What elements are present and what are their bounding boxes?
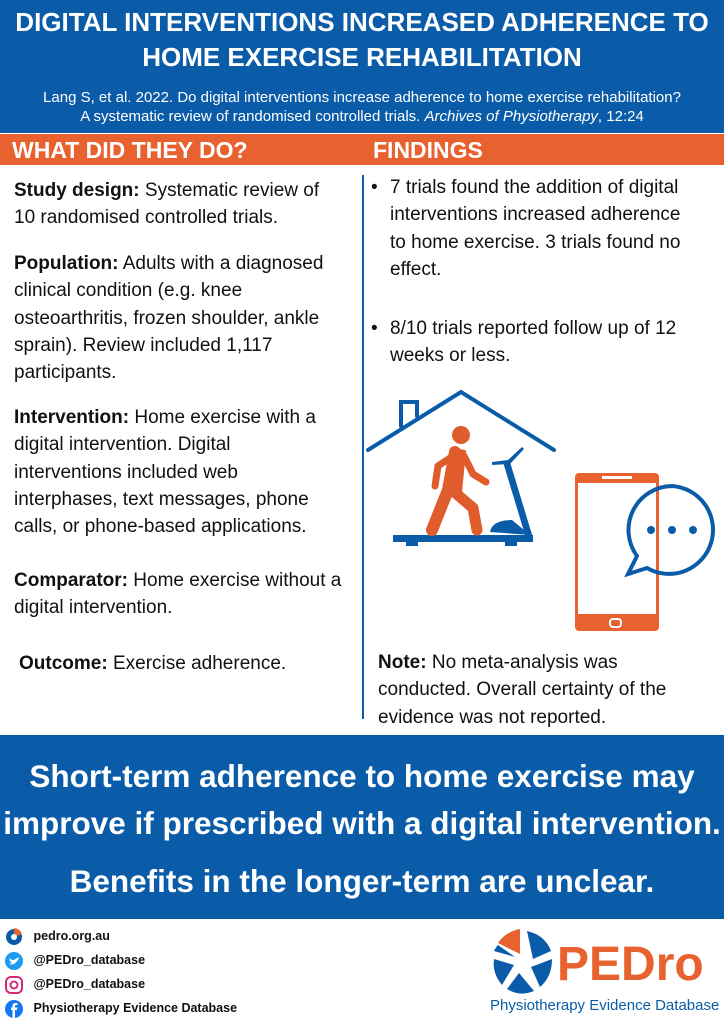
note: evidence was not reported.: [378, 707, 606, 728]
citation: [43, 89, 681, 125]
finding 2: weeks or less.: [390, 345, 510, 366]
text: study design: [14, 180, 320, 228]
text: intervention: interventions included web: [14, 462, 238, 483]
text: comparator: Comparator: Home exercise without a: [14, 570, 341, 591]
link: facebook: [5, 1000, 237, 1018]
text: population: osteoarthritis, frozen shoulder, ankle: [14, 308, 319, 329]
text: intervention: digital intervention. Digital: [14, 434, 231, 455]
text: population: [14, 253, 323, 383]
citation: A systematic review of randomised controlled trials. Archives of Physiotherapy, 12:24: [80, 108, 644, 125]
PEDro logo: [490, 929, 719, 1014]
heading: findings: FINDINGS: [373, 137, 483, 163]
conclusion text: [3, 758, 721, 841]
title: [15, 7, 709, 72]
text: population: participants.: [14, 362, 116, 383]
link: instagram: [5, 976, 145, 994]
logo mark: [494, 929, 552, 994]
link: twitter: @PEDro_database: [33, 953, 145, 967]
text: comparator: digital intervention.: [14, 597, 172, 618]
conclusion text: Short-term adherence to home exercise may: [29, 758, 695, 794]
link: instagram: @PEDro_database: [33, 977, 145, 991]
icon: treadmill: [393, 447, 533, 546]
header panel: [0, 0, 724, 133]
longer-term text: Benefits in the longer-term are unclear.: [70, 863, 654, 899]
section header bar: [0, 134, 724, 165]
finding 1: 7 trials found the addition of digital: [390, 177, 678, 198]
icon: speech bubble: [628, 486, 713, 574]
illustration: home treadmill and phone: [366, 390, 715, 631]
text: study design: Study design: Systematic review of: [14, 180, 319, 201]
link: website: pedro.org.au: [33, 929, 110, 943]
logo wordmark: PEDro: [557, 938, 704, 991]
note: [378, 652, 666, 728]
finding 1: effect.: [390, 259, 441, 280]
link: facebook: Physiotherapy Evidence Database: [33, 1001, 237, 1015]
finding 2: 8/10 trials reported follow up of 12: [390, 318, 676, 339]
text: intervention: Intervention: Home exercise with a: [14, 407, 316, 428]
finding 2: [371, 318, 676, 366]
text: population: sprain). Review included 1,117: [14, 335, 272, 356]
conclusion panel: [0, 735, 724, 919]
note: conducted. Overall certainty of the: [378, 679, 666, 700]
text: comparator: [14, 570, 342, 618]
footer social links: [5, 928, 237, 1018]
text: population: Population: Adults with a diagnosed: [14, 253, 323, 274]
logo tagline: Physiotherapy Evidence Database: [490, 997, 719, 1014]
text: intervention: interphases, text messages, phone: [14, 489, 309, 510]
icon: house roof: [368, 392, 554, 450]
icon: phone: [575, 473, 659, 631]
text: •: [371, 318, 378, 339]
link: website: [6, 928, 110, 945]
text: intervention: [14, 407, 316, 537]
citation: Lang S, et al. 2022. Do digital interventions increase adherence to home exercise rehabilitation?: [43, 89, 681, 106]
icon: walking person: [432, 426, 486, 530]
text: study design: 10 randomised controlled trials.: [14, 207, 278, 228]
conclusion text: improve if prescribed with a digital intervention.: [3, 805, 721, 841]
heading: what did they do: WHAT DID THEY DO?: [12, 137, 248, 163]
text: population: clinical condition (e.g. knee: [14, 280, 242, 301]
text: outcome: Outcome: Exercise adherence.: [19, 653, 286, 674]
finding 1: [371, 177, 680, 280]
text: intervention: calls, or phone-based applications.: [14, 516, 307, 537]
title: HOME EXERCISE REHABILITATION: [142, 42, 582, 72]
finding 1: interventions increased adherence: [390, 204, 680, 225]
title: DIGITAL INTERVENTIONS INCREASED ADHERENCE TO: [15, 7, 709, 37]
text: •: [371, 177, 378, 198]
link: twitter: [5, 952, 145, 970]
note: Note: No meta-analysis was: [378, 652, 618, 673]
finding 1: to home exercise. 3 trials found no: [390, 232, 680, 253]
